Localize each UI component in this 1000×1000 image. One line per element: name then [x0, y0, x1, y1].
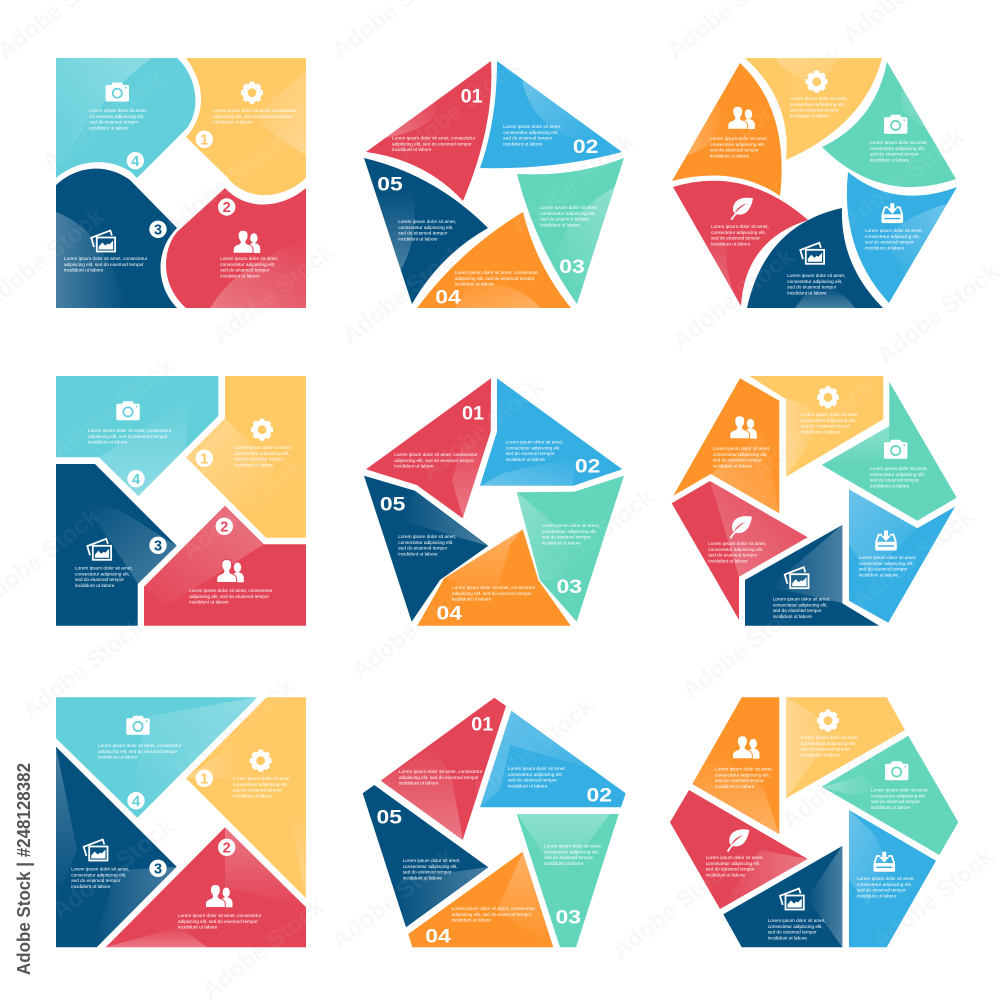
- segment: teal curved: [56, 58, 195, 178]
- segment 02 blue: consectetur adipiscing elit,: [508, 772, 563, 777]
- watermark: faint Adobe Stock pattern on background: Adobe Stock: [337, 238, 470, 350]
- segment 05 navy: 05: [377, 807, 403, 828]
- watermark: faint Adobe Stock pattern on background: Adobe Stock: [527, 483, 660, 595]
- text block: navy: Lorem ipsum dolor sit amet, consectetur: [64, 256, 148, 261]
- segment 01 red: [381, 698, 506, 840]
- text block: teal: incididunt ut labore: [98, 755, 138, 760]
- segment navy: sed do eiusmod tempor: [787, 285, 837, 290]
- segment 04 orange: 04: [437, 604, 463, 625]
- segment orange: [672, 63, 782, 196]
- text block: yellow: incididunt ut labore: [233, 793, 273, 798]
- segment: yellow angular: [186, 376, 306, 538]
- segment 02 blue: consectetur adipiscing elit,: [506, 445, 561, 450]
- panel: faceted pentagon diagram: [363, 698, 626, 947]
- text block: yellow: consectetur adipiscing elit,: [234, 451, 289, 456]
- segment yellow: sed do eiusmod tempor: [801, 747, 850, 752]
- segment red: sed do eiusmod tempor: [706, 867, 755, 872]
- segment: yellow triangle: [186, 697, 306, 898]
- icon: people: [217, 560, 244, 582]
- segment: red curved: [166, 188, 306, 308]
- segment red: Lorem ipsum dolor sit amet,: [708, 541, 766, 546]
- segment green: incididunt ut labore: [871, 805, 911, 810]
- segment 02 blue: Lorem ipsum dolor sit amet,: [503, 124, 561, 129]
- segment red: sed do eiusmod tempor: [711, 236, 760, 241]
- segment 01 red: 01: [462, 404, 484, 425]
- segment 04 orange: incididunt ut labore: [455, 282, 494, 287]
- text block: teal: consectetur adipiscing elit,: [89, 114, 144, 119]
- text block: navy: Lorem ipsum dolor sit amet,: [75, 566, 133, 570]
- badge 1: [196, 131, 213, 148]
- segment yellow: incididunt ut labore: [790, 113, 830, 118]
- segment green: Lorem ipsum dolor sit amet,: [871, 788, 929, 792]
- badge 3: [149, 221, 167, 238]
- segment 02 blue: [480, 711, 626, 807]
- text block: yellow: adipiscing elit, sed do eiusmod tempor: [213, 114, 293, 119]
- segment 02 blue: sed do eiusmod tempor: [506, 451, 555, 456]
- text block: red: consectetur adipiscing elit,: [220, 262, 275, 267]
- watermark: faint Adobe Stock pattern on background: Adobe Stock: [177, 453, 310, 565]
- segment 02 blue: incididunt ut labore: [503, 141, 543, 146]
- segment blue: incididunt ut labore: [857, 893, 897, 898]
- segment 03 green: incididunt ut labore: [542, 540, 581, 545]
- watermark: faint Adobe Stock pattern on background: Adobe Stock: [47, 813, 180, 925]
- segment: navy angular: [56, 464, 177, 626]
- icon: photos: [84, 840, 108, 860]
- segment 04 orange: incididunt ut labore: [452, 597, 492, 602]
- segment blue: Lorem ipsum dolor sit amet,: [859, 555, 917, 560]
- segment: yellow curved: [186, 58, 306, 195]
- badge 3: 3: [154, 222, 162, 238]
- segment green: sed do eiusmod tempor: [870, 152, 919, 157]
- segment navy: consectetur adipiscing elit,: [773, 602, 828, 607]
- segment 05 navy: [364, 476, 488, 622]
- segment 05 navy: incididunt ut labore: [398, 551, 438, 556]
- segment green: consectetur adipiscing elit,: [870, 146, 925, 151]
- segment blue: consectetur adipiscing elit,: [859, 561, 914, 566]
- segment 03 green: [517, 158, 624, 304]
- text block: yellow: Lorem ipsum dolor sit amet, consectetur: [213, 108, 297, 113]
- segment navy: incididunt ut labore: [768, 935, 807, 940]
- icon: photos: [91, 230, 115, 252]
- panel: angular pentagon diagram: [364, 378, 624, 626]
- text block: teal: incididunt ut labore: [89, 125, 129, 130]
- segment 01 red: 01: [461, 87, 483, 108]
- segment orange: incididunt ut labore: [710, 153, 750, 158]
- segment green: Lorem ipsum dolor sit amet,: [870, 466, 928, 471]
- text block: teal: adipiscing elit, sed do eiusmod tempor: [98, 749, 178, 754]
- text block: red: incididunt ut labore: [189, 600, 229, 605]
- segment 01 red: incididunt ut labore: [399, 781, 439, 786]
- segment: navy triangle: [56, 747, 177, 947]
- segment 01 red: [366, 378, 491, 518]
- segment red: [672, 481, 808, 620]
- segment 01 red: incididunt ut labore: [392, 147, 432, 152]
- badge 4: 4: [132, 472, 140, 488]
- segment 03 green: Lorem ipsum dolor sit amet,: [542, 523, 600, 528]
- text block: red: sed do eiusmod tempor: [220, 268, 270, 273]
- segment 05 navy: sed do eiusmod tempor: [403, 870, 452, 875]
- segment 04 orange: 04: [425, 926, 451, 947]
- text block: yellow: incididunt ut labore: [234, 462, 274, 467]
- segment blue: sed do eiusmod tempor: [859, 567, 908, 572]
- segment 02 blue: sed do eiusmod tempor: [503, 136, 553, 141]
- segment red: incididunt ut labore: [711, 241, 751, 246]
- watermark: faint Adobe Stock pattern on background: Adobe Stock: [717, 43, 850, 155]
- segment navy: [723, 846, 842, 947]
- segment: navy curved: [56, 169, 177, 308]
- badge 3: [149, 860, 167, 878]
- badge 2: 2: [223, 840, 231, 856]
- badge 2: [218, 839, 235, 856]
- text block: teal: Lorem ipsum dolor sit amet, consectetur: [98, 743, 182, 748]
- segment orange: sed do eiusmod tempor: [710, 148, 759, 153]
- segment green: consectetur adipiscing elit,: [871, 793, 926, 798]
- text block: yellow: Lorem ipsum dolor sit amet,: [234, 445, 292, 450]
- segment 03 green: sed do eiusmod tempor: [540, 217, 590, 222]
- segment 04 orange: adipiscing elit, sed do eiusmod tempor: [455, 276, 535, 281]
- panel: curved hexagon diagram: [672, 58, 957, 308]
- segment yellow: consectetur adipiscing elit,: [801, 418, 856, 423]
- segment red: incididunt ut labore: [708, 558, 748, 563]
- segment yellow: [745, 58, 882, 160]
- segment blue: [847, 172, 957, 303]
- segment 02 blue: consectetur adipiscing elit,: [503, 130, 558, 135]
- segment red: consectetur adipiscing elit,: [706, 861, 761, 866]
- segment orange: incididunt ut labore: [715, 784, 755, 789]
- text block: navy: sed do eiusmod tempor: [75, 577, 124, 582]
- segment 04 orange: adipiscing elit, sed do eiusmod tempor: [452, 591, 532, 596]
- segment 02 blue: [480, 61, 622, 168]
- stock ID vertical caption: Adobe Stock | #248128382: [13, 763, 34, 975]
- text block: red: incididunt ut labore: [178, 925, 218, 930]
- segment yellow: incididunt ut labore: [801, 429, 841, 434]
- watermark: faint Adobe Stock pattern on background: Adobe Stock: [837, 123, 970, 235]
- segment yellow: incididunt ut labore: [801, 752, 841, 757]
- segment red: consectetur adipiscing elit,: [711, 230, 766, 235]
- segment navy: incididunt ut labore: [773, 614, 812, 619]
- icon: photos: [87, 539, 111, 560]
- segment 05 navy: [364, 158, 488, 304]
- segment 02 blue: Lorem ipsum dolor sit amet,: [508, 766, 566, 771]
- text block: teal: adipiscing elit, sed do eiusmod tempor: [88, 434, 168, 439]
- segment green: incididunt ut labore: [870, 157, 910, 162]
- segment red: [670, 790, 808, 909]
- segment 05 navy: [363, 785, 488, 927]
- text block: red: Lorem ipsum dolor sit amet, consectetur: [178, 913, 262, 918]
- text block: yellow: sed do eiusmod tempor: [233, 788, 282, 793]
- segment yellow: [749, 376, 883, 477]
- segment 01 red: [366, 61, 491, 201]
- segment red: [673, 181, 808, 306]
- segment yellow: Lorem ipsum dolor sit amet,: [790, 96, 848, 101]
- watermark: faint Adobe Stock pattern on background: Adobe Stock: [47, 353, 180, 465]
- segment 03 green: 03: [556, 908, 581, 929]
- text block: red: adipiscing elit, sed do eiusmod tempor: [189, 594, 269, 599]
- segment blue: consectetur adipiscing elit,: [857, 882, 912, 887]
- segment green: sed do eiusmod tempor: [871, 799, 920, 804]
- segment 03 green: 03: [557, 577, 582, 598]
- segment 03 green: [517, 476, 624, 622]
- watermark: faint Adobe Stock pattern on background: Adobe Stock: [747, 373, 880, 485]
- segment yellow: Lorem ipsum dolor sit amet,: [801, 412, 859, 417]
- watermark: faint Adobe Stock pattern on background: Adobe Stock: [17, 613, 150, 725]
- segment 04 orange: adipiscing elit, sed do eiusmod tempor: [452, 912, 532, 917]
- segment yellow: consectetur adipiscing elit,: [801, 741, 856, 746]
- segment 03 green: [517, 814, 619, 947]
- segment 02 blue: incididunt ut labore: [508, 783, 548, 788]
- segment yellow: [786, 697, 905, 798]
- watermark: faint Adobe Stock pattern on background: Adobe Stock: [677, 593, 810, 705]
- text block: navy: incididunt ut labore: [64, 268, 104, 273]
- segment 05 navy: 05: [377, 174, 403, 195]
- text block: navy: Lorem ipsum dolor sit amet,: [71, 866, 129, 872]
- segment red: sed do eiusmod tempor: [708, 553, 758, 558]
- badge 2: [216, 518, 233, 536]
- segment 05 navy: sed do eiusmod tempor: [398, 231, 448, 236]
- segment orange: sed do eiusmod tempor: [713, 458, 762, 463]
- panel: angular square diagram: [56, 376, 306, 626]
- segment navy: sed do eiusmod tempor: [768, 930, 817, 935]
- badge 4: 4: [132, 794, 140, 810]
- segment 01 red: adipiscing elit, sed do eiusmod tempor: [392, 141, 472, 146]
- segment orange: [692, 697, 779, 834]
- segment 02 blue: 02: [575, 456, 600, 477]
- icon: people: [233, 230, 260, 253]
- segment 05 navy: Lorem ipsum dolor sit amet,: [398, 219, 456, 224]
- segment 05 navy: sed do eiusmod tempor: [398, 546, 448, 551]
- text block: red: Lorem ipsum dolor sit amet, consectetur: [189, 588, 273, 593]
- segment yellow: consectetur adipiscing elit,: [790, 102, 845, 107]
- badge 1: 1: [200, 452, 208, 468]
- segment green: Lorem ipsum dolor sit amet,: [870, 140, 928, 145]
- segment yellow: sed do eiusmod tempor: [790, 108, 839, 113]
- text block: yellow: incididunt ut labore: [213, 120, 253, 125]
- watermark: faint Adobe Stock pattern on background: Adobe Stock: [417, 373, 550, 485]
- segment orange: sed do eiusmod tempor: [715, 778, 764, 783]
- segment 01 red: adipiscing elit, sed do eiusmod tempor: [394, 458, 474, 463]
- watermark: faint Adobe Stock pattern on background: Adobe Stock: [167, 673, 300, 785]
- segment 04 orange: [417, 529, 571, 626]
- segment green: [822, 62, 956, 187]
- segment orange: incididunt ut labore: [713, 463, 752, 468]
- segment blue: incididunt ut labore: [865, 245, 905, 250]
- segment red: incididunt ut labore: [706, 872, 745, 877]
- segment blue: [849, 489, 955, 623]
- segment 03 green: sed do eiusmod tempor: [544, 855, 593, 860]
- segment: teal triangle: [56, 697, 257, 818]
- segment yellow: Lorem ipsum dolor sit amet,: [801, 735, 859, 740]
- segment orange: Lorem ipsum dolor sit amet,: [713, 446, 771, 451]
- segment red: consectetur adipiscing elit,: [708, 547, 763, 552]
- watermark: faint Adobe Stock pattern on background: Adobe Stock: [667, 243, 800, 355]
- segment 03 green: consectetur adipiscing elit,: [540, 211, 595, 216]
- segment: red angular: [144, 506, 306, 626]
- segment 04 orange: Lorem ipsum dolor sit amet, consectetur: [452, 585, 536, 590]
- panel: rounded square diagram: [56, 58, 306, 308]
- text block: teal: sed do eiusmod tempor: [89, 120, 139, 125]
- segment navy: Lorem ipsum dolor sit amet,: [773, 596, 831, 602]
- segment 03 green: incididunt ut labore: [540, 222, 580, 227]
- segment 05 navy: incididunt ut labore: [403, 875, 442, 880]
- badge 4: [127, 792, 145, 810]
- segment green: incididunt ut labore: [870, 483, 910, 488]
- segment orange: Lorem ipsum dolor sit amet,: [715, 766, 773, 772]
- watermark: faint Adobe Stock pattern on background: Adobe Stock: [467, 693, 600, 805]
- segment blue: Lorem ipsum dolor sit amet,: [865, 228, 923, 233]
- segment 01 red: 01: [471, 714, 494, 735]
- text block: red: incididunt ut labore: [220, 273, 260, 278]
- watermark: faint Adobe Stock pattern on background: Adobe Stock: [607, 853, 740, 965]
- text block: teal: incididunt ut labore: [88, 440, 128, 445]
- segment 03 green: sed do eiusmod tempor: [542, 535, 591, 540]
- text block: navy: sed do eiusmod tempor: [71, 878, 121, 883]
- segment 03 green: 03: [559, 257, 585, 278]
- badge 3: [149, 537, 167, 554]
- segment 03 green: consectetur adipiscing elit,: [544, 849, 599, 854]
- segment red: Lorem ipsum dolor sit amet,: [706, 855, 764, 860]
- watermark: faint Adobe Stock pattern on background: Adobe Stock: [847, 503, 980, 615]
- segment 03 green: Lorem ipsum dolor sit amet,: [540, 205, 598, 210]
- segment navy: [747, 208, 883, 308]
- segment red: Lorem ipsum dolor sit amet,: [711, 224, 769, 229]
- segment 05 navy: consectetur adipiscing elit,: [398, 225, 453, 230]
- segment 04 orange: Lorem ipsum dolor sit amet, consectetur: [455, 270, 539, 275]
- segment 05 navy: Lorem ipsum dolor sit amet,: [403, 858, 461, 863]
- icon: camera: [106, 82, 129, 102]
- segment blue: incididunt ut labore: [859, 572, 898, 577]
- segment blue: consectetur adipiscing elit,: [865, 234, 920, 239]
- segment orange: consectetur adipiscing elit,: [710, 142, 765, 147]
- watermark: faint Adobe Stock pattern on background: Adobe Stock: [207, 238, 340, 350]
- watermark: faint Adobe Stock pattern on background: Adobe Stock: [327, 843, 460, 955]
- icon: gear: [250, 750, 272, 772]
- segment 05 navy: 05: [380, 495, 406, 516]
- segment navy: consectetur adipiscing elit,: [768, 924, 823, 929]
- badge 2: 2: [223, 200, 231, 216]
- text block: yellow: sed do eiusmod tempor: [234, 457, 284, 462]
- segment 04 orange: 04: [435, 288, 461, 309]
- text block: yellow: consectetur adipiscing elit,: [233, 782, 288, 787]
- segment 02 blue: sed do eiusmod tempor: [508, 778, 557, 783]
- text block: teal: Lorem ipsum dolor sit amet,: [89, 108, 147, 113]
- text block: navy: consectetur adipiscing elit,: [71, 872, 126, 877]
- segment 03 green: consectetur adipiscing elit,: [542, 529, 597, 534]
- segment blue: sed do eiusmod tempor: [865, 240, 914, 245]
- segment 05 navy: Lorem ipsum dolor sit amet,: [398, 534, 456, 539]
- segment 02 blue: [480, 378, 622, 486]
- panel: curved pentagon diagram: [364, 61, 624, 309]
- segment 02 blue: incididunt ut labore: [506, 457, 545, 462]
- segment 01 red: adipiscing elit, sed do eiusmod tempor: [399, 775, 479, 780]
- icon: gear: [241, 82, 263, 104]
- watermark: faint Adobe Stock pattern on background: Adobe Stock: [347, 573, 480, 685]
- segment navy: incididunt ut labore: [787, 290, 827, 295]
- segment 05 navy: consectetur adipiscing elit,: [398, 540, 453, 545]
- badge 1: 1: [200, 772, 208, 788]
- watermark: faint Adobe Stock pattern on background: Adobe Stock: [159, 128, 292, 240]
- icon: camera: [126, 716, 150, 735]
- watermark: faint Adobe Stock pattern on background: Adobe Stock: [392, 53, 525, 165]
- segment 01 red: incididunt ut labore: [394, 464, 434, 469]
- segment green: [822, 382, 957, 521]
- badge 4: [127, 470, 145, 488]
- segment 04 orange: [408, 852, 553, 947]
- badge 3: 3: [154, 862, 162, 878]
- segment orange: Lorem ipsum dolor sit amet,: [710, 136, 768, 141]
- watermark: faint Adobe Stock pattern on background: Adobe Stock: [507, 128, 640, 240]
- segment 01 red: Lorem ipsum dolor sit amet, consectetur: [392, 136, 476, 140]
- segment blue: Lorem ipsum dolor sit amet,: [857, 876, 915, 881]
- badge 2: 2: [220, 520, 228, 536]
- segment navy: sed do eiusmod tempor: [773, 608, 822, 613]
- segment 02 blue: 02: [573, 137, 598, 158]
- segment: teal angular: [56, 376, 218, 496]
- segment green: consectetur adipiscing elit,: [870, 472, 925, 477]
- segment 04 orange: [417, 212, 571, 309]
- icon: gear: [251, 419, 273, 441]
- badge 2: [218, 198, 235, 216]
- segment 02 blue: Lorem ipsum dolor sit amet,: [506, 440, 564, 444]
- text block: teal: Lorem ipsum dolor sit amet, consectetur: [88, 428, 172, 433]
- segment orange: consectetur adipiscing elit,: [715, 772, 770, 777]
- watermark: faint Adobe Stock pattern on background: Adobe Stock: [867, 843, 1000, 955]
- text block: navy: consectetur adipiscing elit,: [75, 571, 130, 576]
- segment green: sed do eiusmod tempor: [870, 478, 919, 483]
- text block: navy: adipiscing elit, sed do eiusmod tempor: [64, 262, 144, 267]
- segment orange: consectetur adipiscing elit,: [713, 452, 768, 457]
- watermark: faint Adobe Stock pattern on background: Adobe Stock: [37, 65, 170, 177]
- panel: faceted hexagon diagram: [670, 697, 958, 947]
- icon: people: [206, 884, 232, 908]
- segment: red triangle: [106, 827, 306, 947]
- badge 1: [196, 450, 213, 468]
- text block: red: Lorem ipsum dolor sit amet,: [220, 256, 278, 261]
- segment orange: [673, 378, 779, 513]
- segment 03 green: Lorem ipsum dolor sit amet,: [544, 844, 602, 848]
- segment 01 red: Lorem ipsum dolor sit amet, consectetur: [399, 769, 483, 774]
- segment 03 green: incididunt ut labore: [544, 861, 584, 866]
- panel: triangular square diagram: [56, 697, 306, 947]
- segment 04 orange: Lorem ipsum dolor sit amet, consectetur: [452, 906, 536, 911]
- segment 05 navy: incididunt ut labore: [398, 236, 438, 241]
- badge 4: [127, 152, 144, 170]
- segment navy: consectetur adipiscing elit,: [787, 279, 842, 284]
- segment green: [822, 736, 958, 855]
- text block: navy: incididunt ut labore: [75, 583, 115, 588]
- badge 3: 3: [154, 538, 162, 554]
- icon: camera: [116, 401, 140, 420]
- segment 02 blue: 02: [587, 786, 612, 807]
- watermark: faint Adobe Stock pattern on background: Adobe Stock: [777, 723, 910, 835]
- segment navy: Lorem ipsum dolor sit amet,: [768, 918, 826, 923]
- segment navy: Lorem ipsum dolor sit amet,: [787, 273, 845, 278]
- text block: navy: incididunt ut labore: [71, 884, 111, 889]
- segment navy: [745, 525, 879, 626]
- segment yellow: sed do eiusmod tempor: [801, 424, 850, 429]
- segment 04 orange: incididunt ut labore: [452, 918, 491, 923]
- badge 1: 1: [200, 132, 208, 148]
- segment blue: [849, 810, 936, 947]
- segment 01 red: Lorem ipsum dolor sit amet, consectetur: [394, 452, 478, 457]
- segment 05 navy: consectetur adipiscing elit,: [403, 864, 458, 869]
- panel: angular hexagon diagram: [672, 376, 957, 626]
- badge 1: [196, 770, 213, 788]
- segment blue: sed do eiusmod tempor: [857, 888, 906, 893]
- badge 4: 4: [131, 154, 139, 170]
- text block: red: adipiscing elit, sed do eiusmod tempor: [178, 919, 258, 924]
- text block: yellow: Lorem ipsum dolor sit amet,: [233, 776, 291, 781]
